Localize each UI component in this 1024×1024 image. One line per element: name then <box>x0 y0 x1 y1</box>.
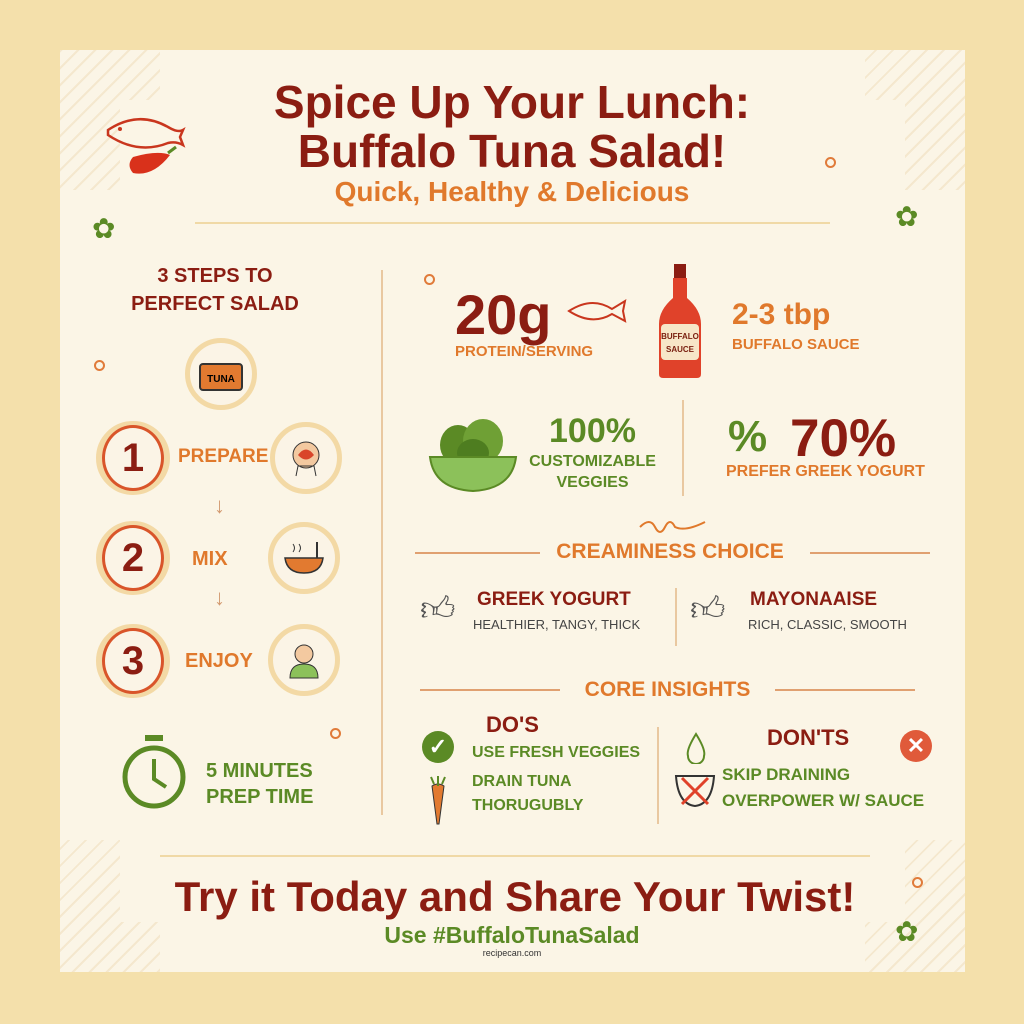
panel: do's: DO'S <box>486 712 539 737</box>
icon: stopwatch <box>122 735 186 808</box>
text: prep time: PREP TIME <box>206 786 313 808</box>
panel: don'ts: SKIP DRAINING <box>722 765 850 784</box>
choice: greek yogurt: HEALTHIER, TANGY, THICK <box>473 617 640 632</box>
step 3 <box>96 624 170 698</box>
step 1: 1 <box>122 436 144 480</box>
icon: tuna can: TUNA <box>207 374 235 385</box>
panel: steps: ↓ <box>214 493 225 518</box>
step 1 <box>96 421 170 495</box>
stat: protein <box>455 283 626 360</box>
subtitle: Quick, Healthy & Delicious <box>335 176 689 207</box>
icon: fish and chili <box>106 118 186 174</box>
panel: steps: ↓ <box>214 585 225 610</box>
heading: steps: 3 STEPS TO <box>157 265 273 287</box>
choice: greek yogurt: 👍︎ <box>420 590 456 628</box>
icon: parsley bottom: ✿ <box>895 916 918 947</box>
panel: don'ts <box>674 725 932 810</box>
choice: mayonnaise: 👍︎ <box>690 590 726 628</box>
icon: strainer <box>674 775 716 807</box>
stat: sauce: BUFFALO SAUCE <box>732 336 860 353</box>
footer: hashtag: Use #BuffaloTunaSalad <box>384 922 640 948</box>
title <box>274 76 750 177</box>
icon: tuna can <box>185 338 257 410</box>
icon: check <box>422 731 454 763</box>
step 2: 2 <box>122 536 144 580</box>
icon: parsley right: ✿ <box>895 201 918 232</box>
stat: protein: 20g <box>455 283 552 346</box>
heading: steps: PERFECT SALAD <box>131 293 299 315</box>
icon: salad bowl <box>428 419 518 492</box>
choice: greek yogurt: GREEK YOGURT <box>477 589 631 610</box>
stat: sauce: 2-3 tbp <box>732 298 830 331</box>
stat: protein: PROTEIN/SERVING <box>455 343 593 360</box>
panel: steps: MIX <box>192 548 228 570</box>
text: prep time <box>206 760 313 808</box>
stat: greek yogurt: 70% <box>790 409 896 468</box>
choice: mayonnaise <box>690 589 907 632</box>
footer: credit: recipecan.com <box>483 948 541 958</box>
heading: creaminess choice: CREAMINESS CHOICE <box>556 540 784 563</box>
text: prep time: 5 MINUTES <box>206 760 313 782</box>
choice: greek yogurt <box>420 589 640 632</box>
choice: mayonnaise: RICH, CLASSIC, SMOOTH <box>748 617 907 632</box>
stat: greek yogurt: PREFER GREEK YOGURT <box>726 463 925 480</box>
icon: parsley left: ✿ <box>92 213 115 244</box>
title: Spice Up Your Lunch: <box>274 76 750 128</box>
panel: do's: USE FRESH VEGGIES <box>472 744 640 761</box>
step 2 <box>96 521 170 595</box>
stat: veggies: CUSTOMIZABLE <box>529 453 656 470</box>
panel: do's: THORUGUBLY <box>472 797 583 814</box>
panel: steps <box>96 265 342 698</box>
stat: veggies <box>529 412 656 491</box>
stat: greek yogurt <box>726 409 925 480</box>
panel: steps: PREPARE <box>178 446 268 467</box>
panel: do's <box>422 712 640 824</box>
icon: x circle: ✕ <box>907 733 925 758</box>
stat: greek yogurt: % <box>728 412 767 461</box>
stat: veggies: 100% <box>549 412 636 450</box>
vertical divider <box>381 270 383 815</box>
divider <box>195 222 830 224</box>
heading: steps <box>131 265 299 315</box>
choice: mayonnaise: MAYONAAISE <box>750 589 877 610</box>
heading: creaminess choice <box>415 521 930 563</box>
panel: do's: DRAIN TUNA <box>472 773 572 790</box>
icon: check: ✓ <box>429 734 447 759</box>
step 3: 3 <box>122 638 144 682</box>
icon: sauce bottle: BUFFALO <box>661 332 699 341</box>
icon: x circle <box>900 730 932 762</box>
icon: fish small <box>567 299 626 323</box>
panel: don'ts: OVERPOWER W/ SAUCE <box>722 791 924 810</box>
footer: call to action: Try it Today and Share Your Twist! <box>175 873 855 920</box>
icon: drop <box>686 732 706 764</box>
title: Buffalo Tuna Salad! <box>298 125 726 177</box>
stat: sauce <box>732 298 860 353</box>
icon: carrot <box>430 776 446 824</box>
panel: steps: ENJOY <box>185 650 253 672</box>
divider bottom <box>160 855 870 857</box>
icon: sauce bottle <box>659 264 701 378</box>
stat: veggies: VEGGIES <box>556 474 629 491</box>
panel: don'ts: DON'TS <box>767 725 849 750</box>
heading: core insights: CORE INSIGHTS <box>585 678 750 701</box>
panel: main card <box>60 50 965 972</box>
icon: sauce bottle: SAUCE <box>666 345 695 354</box>
